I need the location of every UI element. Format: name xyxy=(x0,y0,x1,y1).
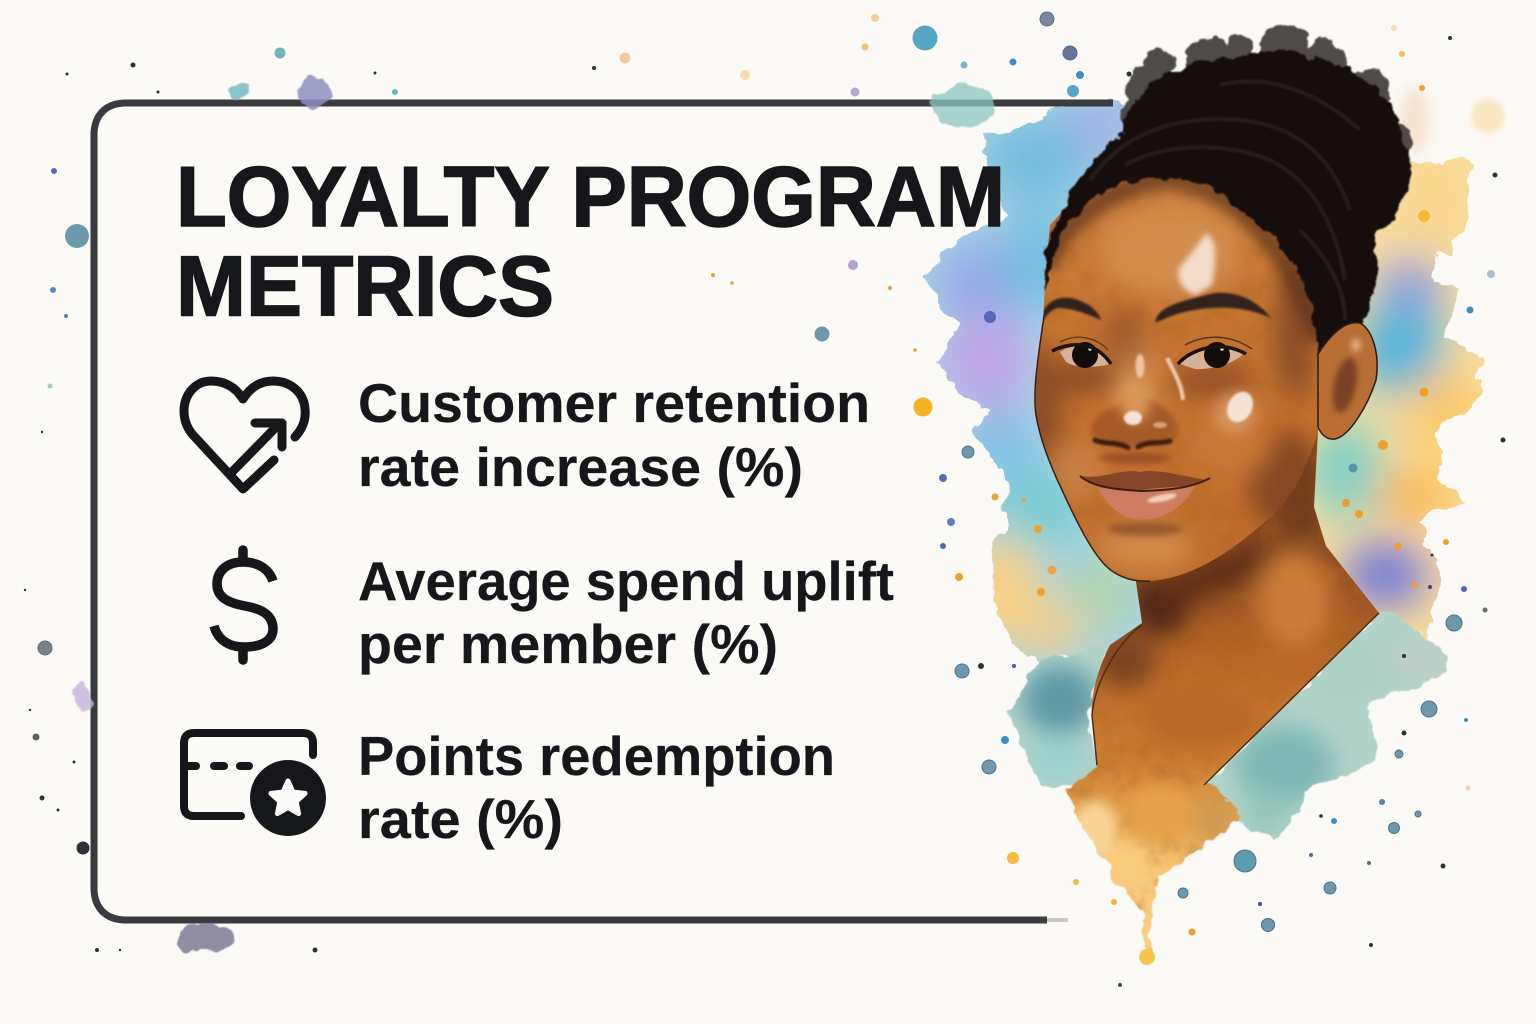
chin shadow xyxy=(1107,522,1183,536)
metric: average spend xyxy=(358,550,894,675)
face xyxy=(1036,176,1320,581)
right eye xyxy=(1178,337,1252,369)
frame xyxy=(94,103,1113,920)
metric: points redemption: Points redemption xyxy=(358,725,835,787)
shirt xyxy=(1006,610,1448,841)
metric: points redemption xyxy=(358,725,835,850)
forehead highlight xyxy=(1178,233,1215,295)
mouth xyxy=(1080,471,1210,520)
hair strands xyxy=(1090,81,1360,320)
paint splatter: bright blue dots xyxy=(48,26,1474,824)
icon: points card with star xyxy=(184,733,326,836)
neck, chest and orange drip xyxy=(1065,430,1379,952)
title: METRICS xyxy=(176,240,554,334)
metric: average spend: Average spend uplift xyxy=(358,550,894,612)
portrait xyxy=(990,24,1470,960)
metric: customer retention: Customer retention xyxy=(358,372,870,434)
cheek highlight xyxy=(1210,386,1260,438)
nose highlights xyxy=(1124,411,1142,425)
collar lines xyxy=(1092,613,1379,785)
hair xyxy=(1044,51,1410,360)
title xyxy=(176,150,1005,334)
watercolor splash: right xyxy=(1314,157,1485,640)
forehead hairline shadow xyxy=(1046,178,1320,340)
left eyebrow xyxy=(1042,298,1101,322)
nose xyxy=(1090,398,1178,449)
metric: customer retention xyxy=(358,372,870,498)
ear xyxy=(1318,323,1377,439)
faint yellow wash near hair xyxy=(1400,86,1505,154)
watercolor splash: left xyxy=(922,98,1142,663)
metric: average spend: per member (%) xyxy=(358,613,778,675)
icon: heart with arrow xyxy=(184,381,305,489)
hair puff fringe xyxy=(1119,24,1413,158)
metric: customer retention: rate increase (%) xyxy=(358,436,803,498)
ear shading xyxy=(1328,338,1362,415)
paint splatter: orange and yellow dots xyxy=(620,14,1470,965)
left eye xyxy=(1052,337,1111,368)
right eyebrow xyxy=(1155,293,1271,322)
icon: dollar sign xyxy=(214,550,273,660)
metric: points redemption: rate (%) xyxy=(358,788,563,850)
face outline xyxy=(1035,316,1150,581)
watercolor blotches around frame xyxy=(74,78,993,953)
title: LOYALTY PROGRAM xyxy=(176,150,1005,245)
